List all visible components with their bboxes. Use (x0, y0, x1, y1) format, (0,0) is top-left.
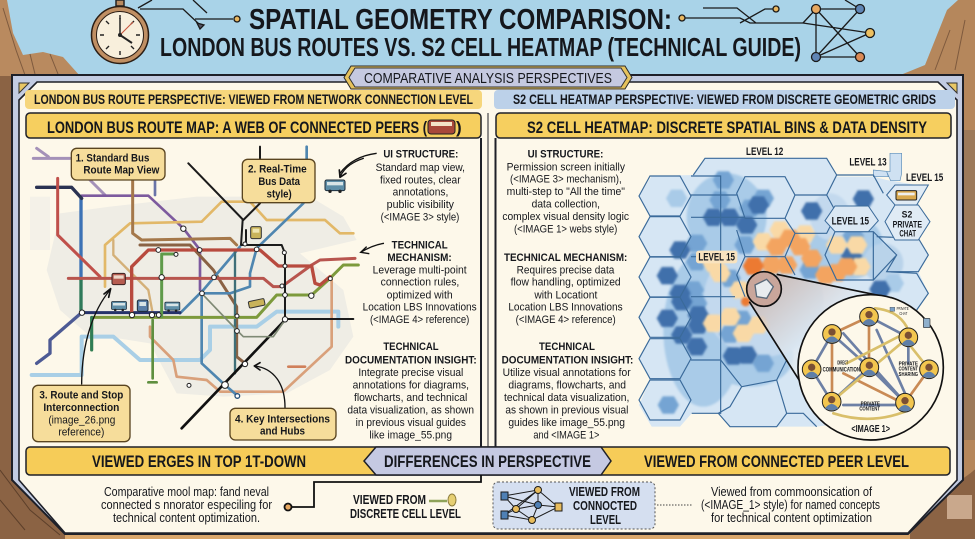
network labels: DIRECT (837, 360, 848, 366)
connector from band to description (284, 475, 481, 510)
callout 2: Bus Data (258, 176, 301, 188)
label: level 15 top right: LEVEL 15 (906, 172, 943, 184)
block: technical documentation insight: TECHNICAL (539, 341, 595, 353)
bottom right description: for technical content optimization (711, 511, 872, 525)
callout 4 (230, 408, 336, 440)
hex: bus icon (887, 185, 928, 205)
dotted connector (657, 504, 693, 506)
dashed box: viewed from connected level: LEVEL (590, 512, 621, 527)
block: ui structure: multi-step to "All the time" (507, 186, 625, 198)
network labels: CONTENT (899, 367, 918, 373)
brown lines (133, 180, 237, 245)
block: ui structure: annotations, (393, 187, 448, 199)
block: technical mechanism: optimized with (387, 289, 453, 301)
block: technical documentation insight: and <IMAGE 1> (533, 429, 600, 441)
block: ui structure: Permission screen initially (507, 161, 625, 173)
left column notes (340, 149, 477, 441)
block: technical mechanism (363, 239, 477, 326)
block: technical documentation insight: DOCUMENTATION INSIGHT: (345, 354, 477, 366)
arrow to bus stop (82, 289, 111, 384)
block: ui structure: (<IMAGE 3> mechanism), (510, 174, 622, 186)
network labels: PRIVATE (899, 361, 918, 367)
block: technical mechanism: TECHNICAL MECHANISM: (504, 252, 627, 264)
block: technical documentation insight: flowcharts, and technical (354, 392, 467, 404)
dashed box: viewed from connected level (493, 482, 655, 529)
medium density cells (658, 171, 864, 414)
river line (32, 312, 338, 375)
section badge: differences in perspective (364, 447, 611, 475)
block: ui structure: (<IMAGE 3> style) (381, 212, 460, 224)
callout 2: style) (267, 188, 292, 200)
peers (802, 307, 938, 412)
dashed box: viewed from connected level: VIEWED FROM (569, 484, 640, 499)
block: technical mechanism: connection rules, (381, 277, 459, 289)
bottom right description (701, 485, 880, 525)
arrow to hub (254, 363, 285, 407)
tan lines (105, 202, 353, 287)
block: technical mechanism: flow handling, optimized (511, 277, 621, 289)
hottest cells (741, 257, 764, 306)
bottom left description: technical content optimization. (113, 511, 260, 525)
bottom right description: (<IMAGE_1> style) for named concepts (701, 498, 880, 512)
bottom comparison band: VIEWED ERGES IN TOP 1T-DOWN (92, 452, 306, 471)
network labels: <IMAGE 1> (851, 424, 890, 435)
callout 1 (71, 148, 165, 180)
block: technical documentation insight (345, 341, 477, 441)
callout 4: and Hubs (260, 426, 305, 438)
block: technical mechanism: Requires precise data (517, 264, 615, 276)
bottom right description: Viewed from commoonsication of (711, 485, 872, 499)
block: technical documentation insight: Integrate precise visual (358, 367, 463, 379)
block: technical mechanism: Location LBS Innovations (363, 302, 477, 314)
network labels (823, 306, 930, 435)
s2 cell heatmap (639, 146, 943, 440)
title decoration: right network icon (679, 0, 874, 62)
block: technical documentation insight: DOCUMENTATION INSIGHT: (502, 354, 633, 366)
callout 3: (image_26.png (48, 414, 115, 426)
stopwatch icon (92, 0, 148, 64)
network labels: PRIVATE (897, 306, 909, 311)
block: ui structure: (<IMAGE 1> webs style) (514, 224, 618, 236)
block: ui structure: public visibility (387, 199, 454, 211)
bottom left description: Comparative mool map: fand neval (104, 485, 269, 499)
block: technical mechanism: (<IMAGE 4> reference) (516, 314, 616, 326)
section badge: comparative analysis perspectives: COMPARATIVE ANALYSIS PERSPECTIVES (364, 70, 612, 87)
block: technical documentation insight: annotations for diagrams, (353, 379, 469, 391)
network labels: CONTENT (859, 407, 880, 413)
steel blue lines (180, 147, 307, 395)
red lines (58, 178, 100, 277)
ground strip (65, 534, 910, 539)
left canyon rock (0, 0, 80, 539)
block: technical mechanism: TECHNICAL (392, 239, 448, 251)
light density cells (663, 173, 904, 407)
block: technical mechanism: with Locationt (533, 289, 598, 301)
label: level 12: LEVEL 12 (746, 146, 783, 158)
block: ui structure: Standard map view, (376, 162, 465, 174)
heading: bus route map (26, 113, 481, 138)
network labels: CHAT (899, 311, 908, 316)
blue hex outlines (639, 158, 928, 427)
label: viewed from discrete cell level (350, 492, 461, 521)
salmon line (150, 280, 332, 392)
block: technical mechanism: (<IMAGE 4> reference) (370, 314, 470, 326)
zoomed peer network circle (798, 295, 943, 440)
callout 1: Route Map View (83, 165, 160, 177)
block: ui structure: fixed routes, clear (380, 174, 461, 186)
hex: s2 private chat: PRIVATE (893, 219, 922, 229)
block: technical documentation insight: Utilize visual annotations for (503, 367, 631, 379)
icon: small key connector (429, 494, 456, 506)
title decoration: left circuit lines (138, 0, 240, 29)
heading: s2 heatmap (496, 113, 951, 138)
block: technical documentation insight: data visualization, as shown (347, 404, 474, 416)
callout 2 (242, 159, 315, 203)
hex: s2 private chat: CHAT (899, 229, 916, 239)
label: level 13: LEVEL 13 (849, 157, 887, 169)
block: technical documentation insight: guides like image_55.png (508, 417, 625, 429)
network labels: COMMUNICATION (823, 367, 860, 374)
right column notes (502, 149, 633, 441)
hex label: level 15: LEVEL 15 (832, 215, 869, 227)
block: ui structure: complex visual density logic (502, 211, 629, 223)
block: ui structure: UI STRUCTURE: (528, 149, 603, 161)
green lines (92, 265, 358, 350)
label: viewed from discrete cell level: DISCRETE CELL LEVEL (350, 506, 461, 521)
title (160, 4, 801, 62)
arrow: technical mechanism (361, 243, 384, 254)
bottom comparison band (26, 447, 950, 475)
label: viewed from discrete cell level: VIEWED FROM (353, 492, 426, 507)
zoom cone edges (749, 274, 880, 387)
block: technical mechanism: MECHANISM: (387, 252, 452, 264)
purple line (33, 148, 105, 195)
stations (79, 226, 332, 388)
black lines (188, 147, 353, 319)
callout 3: Interconnection (43, 402, 120, 414)
hex: s2 private chat: S2 (902, 209, 912, 219)
high density blue cells (657, 190, 891, 365)
icon: mini network (501, 486, 562, 524)
dashed box: viewed from connected level: CONNOCTED (573, 498, 637, 513)
callout 3: reference) (58, 427, 104, 439)
callout 1: 1. Standard Bus (76, 153, 149, 165)
section badge: differences in perspective: DIFFERENCES IN PERSPECTIVE (384, 452, 591, 471)
bus route network map (30, 147, 363, 442)
block: technical documentation insight: like image_55.png (369, 429, 452, 441)
magnifier circle (747, 272, 781, 306)
block: technical mechanism: Location LBS Innovations (508, 302, 623, 314)
label: level 15 left: LEVEL 15 (698, 251, 735, 263)
callout 3: 3. Route and Stop (39, 390, 124, 402)
right canyon rock (898, 0, 975, 539)
block: technical documentation insight: in previous visual guides (356, 417, 466, 429)
callout 3 (33, 385, 130, 442)
block: technical documentation insight (502, 341, 633, 441)
hex base region (639, 158, 930, 427)
block: ui structure (376, 149, 465, 224)
level 13 tab (873, 153, 902, 181)
block: technical documentation insight: technical data visualization, (504, 392, 629, 404)
callout 2: 2. Real-Time (248, 164, 307, 176)
arrow to real-time bus (339, 158, 363, 177)
heading: bus route map: ) (456, 118, 462, 137)
bottom left description: connected s nnorator especiling for (101, 498, 272, 512)
bus icons (111, 180, 345, 312)
block: technical mechanism: Leverage multi-point (373, 264, 467, 276)
section badge: comparative analysis perspectives (344, 66, 632, 89)
bottom left description (101, 485, 272, 525)
block: ui structure: data collection, (532, 199, 600, 211)
block: technical documentation insight: TECHNICAL (383, 341, 439, 353)
peer connection arrows (812, 308, 929, 419)
callout 4: 4. Key Intersections (235, 414, 330, 426)
hex: s2 private chat (885, 205, 930, 240)
title: SPATIAL GEOMETRY COMPARISON: (249, 4, 672, 36)
hex label: level 15 (825, 206, 878, 232)
warm light cells (703, 221, 871, 342)
block: technical documentation insight: as shown in previous visual (505, 404, 628, 416)
block: ui structure (502, 149, 629, 236)
network labels: SHARING (899, 372, 918, 378)
column divider (481, 113, 496, 447)
strip: bus route perspective (25, 90, 482, 109)
zoom cone (750, 275, 880, 387)
warm orange cells (761, 230, 857, 284)
land background (30, 197, 357, 397)
network labels: PRIVATE (861, 401, 880, 407)
block: technical documentation insight: diagrams, flowcharts, and (508, 379, 626, 391)
navy lines (37, 187, 82, 198)
heading: bus route map: LONDON BUS ROUTE MAP: A WEB OF CONNECTED PEERS ( (47, 118, 427, 137)
block: ui structure: UI STRUCTURE: (383, 149, 458, 161)
block: technical mechanism (504, 252, 627, 326)
arrow: ui structure (340, 153, 377, 173)
strip: bus route perspective: LONDON BUS ROUTE PERSPECTIVE: VIEWED FROM NETWORK CONNECTION LEVEL (34, 91, 473, 107)
